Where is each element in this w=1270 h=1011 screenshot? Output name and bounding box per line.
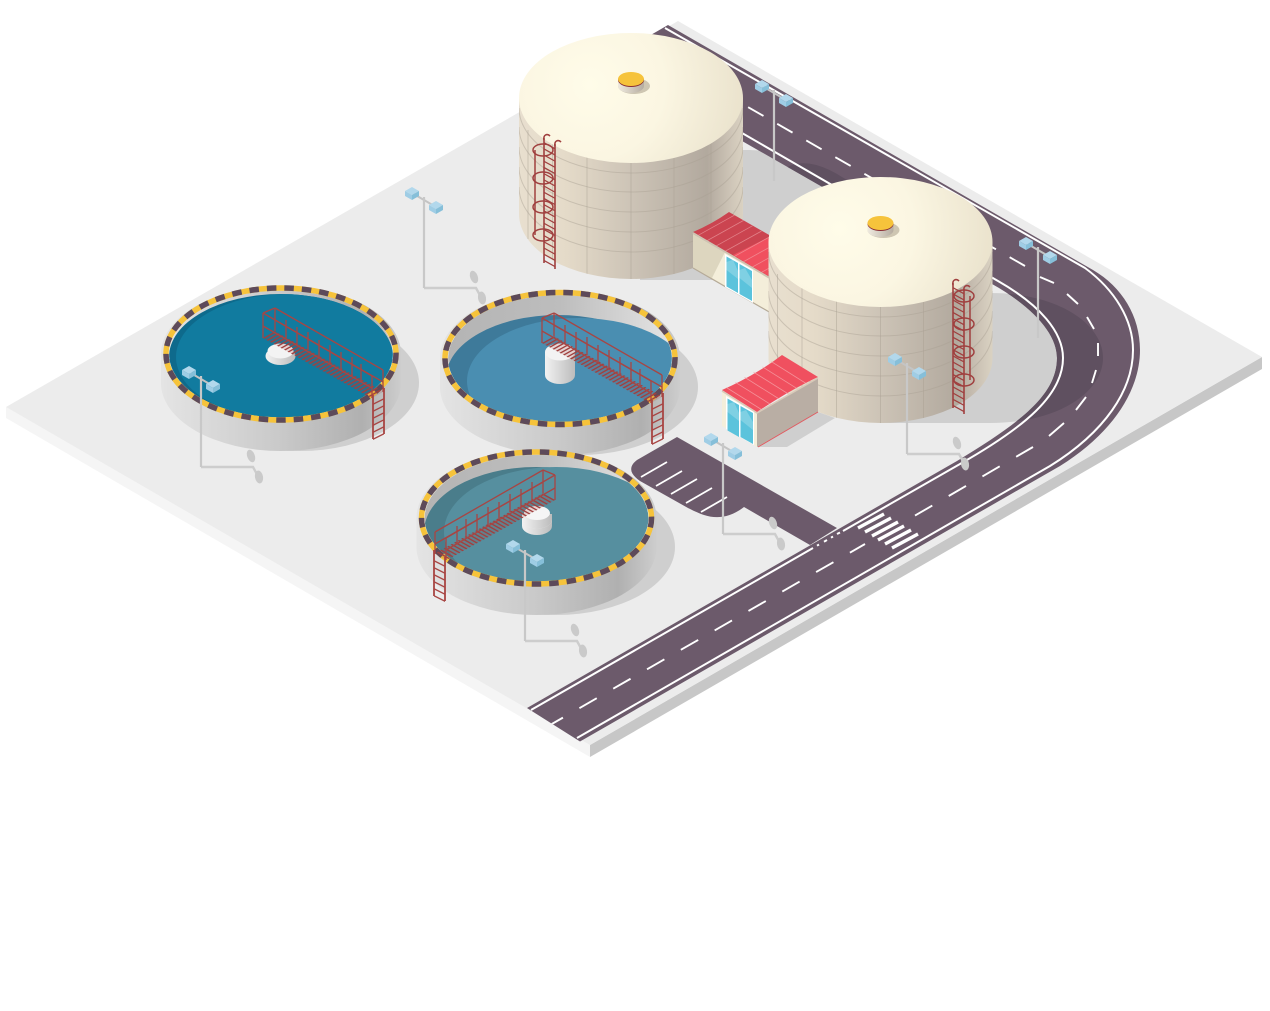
lamp post near road, top xyxy=(755,80,793,181)
clarifier 3 xyxy=(416,450,675,615)
platform: ground slab xyxy=(6,21,1262,757)
door xyxy=(726,396,754,445)
roof xyxy=(693,212,790,289)
lamp post near road, right xyxy=(1019,237,1057,338)
walkway with ladder xyxy=(542,313,663,444)
walkway with ladder xyxy=(263,308,384,439)
road centre dashes xyxy=(546,91,1098,728)
roof xyxy=(722,355,818,412)
illustration: isometric water treatment plant xyxy=(6,21,1262,757)
central hub xyxy=(522,520,552,535)
walkway with ladder xyxy=(434,470,555,601)
tank 1 ladder xyxy=(533,135,561,269)
lamp post by parking xyxy=(704,433,786,551)
clarifier 2 xyxy=(440,290,698,455)
storage tank 1 xyxy=(519,33,743,279)
lamp post on clarifier 3 xyxy=(506,540,588,658)
central hub xyxy=(545,352,575,384)
pump house 2 xyxy=(722,355,835,447)
pump house 1 xyxy=(693,212,807,324)
lamp post on clarifier 1 xyxy=(182,366,264,484)
lamp post by tank 2 xyxy=(888,353,970,471)
hazard rim xyxy=(445,292,675,424)
lamp post top left xyxy=(405,187,487,305)
central hub xyxy=(266,347,296,365)
parking lot and access road xyxy=(631,437,837,545)
hazard rim xyxy=(166,288,396,420)
tank shadows on ground xyxy=(640,150,1103,423)
clarifier 1 xyxy=(161,286,419,451)
door xyxy=(725,254,753,303)
tank 2 ladder xyxy=(953,280,974,414)
road xyxy=(527,25,1140,742)
hazard rim xyxy=(422,452,652,584)
crosswalk xyxy=(858,514,918,548)
storage tank 2 xyxy=(768,177,992,423)
tank shadow on road xyxy=(780,163,1103,423)
road edge lines xyxy=(531,28,1133,738)
